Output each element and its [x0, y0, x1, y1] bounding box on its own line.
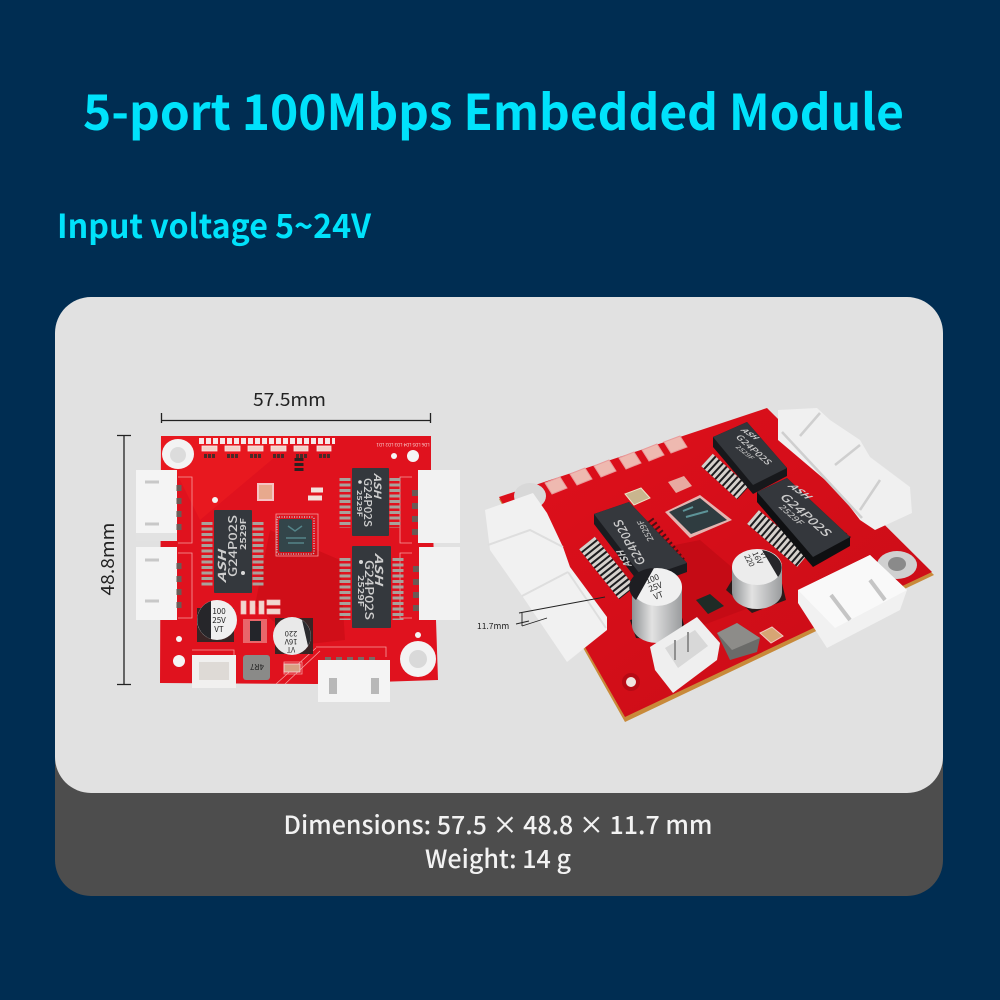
connector J2 bottom: [318, 660, 390, 702]
transformer chip TR1: [345, 546, 398, 628]
ethernet controller: [665, 495, 732, 538]
capacitor 220uF: 16V: [284, 636, 297, 647]
transformer chip TR upper right: [345, 468, 395, 536]
LED row: [545, 436, 687, 494]
weight text: Weight: 14 g: [425, 840, 572, 876]
capacitor 100uF: 100: [644, 571, 661, 587]
crystal: [625, 488, 650, 505]
transformer chip TR2: [207, 510, 258, 593]
chip A front: ASH: [612, 548, 635, 570]
transformer chip TR upper right: 2529F: [354, 490, 364, 517]
connector right upper: [415, 470, 460, 543]
connector power: [650, 617, 720, 693]
chip C front: [753, 478, 850, 567]
mounting holes: [162, 439, 194, 469]
capacitor 220uF: 220: [285, 628, 297, 639]
capacitor 220uF: 220: [741, 553, 757, 568]
capacitor 100uF: VT: [652, 588, 665, 603]
width dimension: 57.5mm: 57.5mm: [253, 386, 326, 412]
subtitle: input voltage: Input voltage 5~24V: [57, 200, 372, 248]
chip B back: ASH: [737, 426, 762, 441]
capacitor 100uF: [629, 568, 684, 643]
height callout: 11.7mm: [477, 597, 605, 632]
chip C front: ASH: [783, 481, 816, 501]
chip A front: 2529F: [634, 518, 657, 543]
power connector J1: [192, 655, 236, 688]
regulator IC: [696, 594, 724, 614]
chip B back: 2529F: [733, 444, 758, 461]
capacitor 220uF: VT: [758, 550, 771, 561]
connector left lower: [136, 547, 179, 620]
transformer chip TR1: G24P02S: [361, 560, 378, 620]
transformer chip TR2: G24P02S: [224, 515, 241, 577]
ethernet controller QFN: [279, 519, 312, 552]
width dimension: 57.5mm: [162, 386, 430, 423]
right mounting hole: [877, 551, 917, 579]
LED resistors: [204, 454, 330, 458]
title: 5-port 100Mbps Embedded Module: [83, 74, 904, 145]
transformer chip TR2: ASH: [214, 548, 230, 584]
connector lower right: [798, 555, 907, 648]
capacitor 220uF: [726, 549, 786, 613]
left mounting hole: [514, 483, 546, 509]
pcb: [499, 408, 932, 717]
panel: product photo area: [55, 297, 943, 793]
small component cluster: [668, 476, 692, 493]
bottom mounting hole: [624, 675, 638, 689]
top-view circuit board: [136, 436, 460, 702]
test pad row: [199, 438, 335, 444]
capacitor 220uF: 16V: [749, 550, 766, 566]
status LEDs: [202, 446, 331, 451]
pin-1 dot TR1: [359, 560, 363, 564]
connector left upper: [136, 470, 179, 541]
connector right lower: [416, 547, 460, 620]
inductor: [243, 655, 270, 680]
connector left: [485, 493, 607, 662]
transformer chip TR upper right: G24P02S: [360, 478, 376, 527]
chip C front: 2529F: [776, 503, 809, 527]
capacitor 100uF: 25V: [647, 579, 664, 595]
small resistors: [241, 600, 280, 614]
regulator IC: [243, 619, 267, 643]
resistors: [294, 458, 304, 472]
capacitor 100uF: [197, 600, 237, 642]
inductor: 4R7: [249, 661, 264, 672]
transformer chip TR1: 2529F: [355, 575, 366, 607]
ceramic capacitor: [760, 627, 783, 643]
chip A front: [587, 502, 687, 593]
height callout: 11.7mm: 11.7mm: [477, 620, 509, 632]
perspective circuit board: [485, 408, 934, 722]
capacitor 220uF: [273, 617, 313, 655]
small ceramic capacitor: [284, 664, 300, 672]
transformer chip TR1: ASH: [371, 552, 387, 587]
transformer chip TR upper right: ASH: [371, 472, 386, 500]
inductor: [717, 623, 760, 660]
dimensions text: Dimensions: 57.5 × 48.8 × 11.7 mm: [284, 806, 712, 842]
capacitor 100uF: 25V: [212, 615, 226, 626]
silkscreen outlines: [178, 477, 412, 684]
transformer chip TR2: 2529F: [238, 518, 249, 550]
connector upper right: [778, 408, 912, 530]
panel: dimensions footer: [55, 700, 943, 896]
pcb: [160, 436, 438, 684]
capacitor 220uF: VT: [287, 644, 295, 654]
chip A front: G24P02S: [609, 518, 650, 567]
pin-1 dot TR: [358, 480, 362, 484]
chip B back: [707, 422, 787, 494]
capacitor 100uF: VT: [214, 624, 224, 635]
chip B back: G24P02S: [732, 432, 777, 467]
capacitor 100uF: 100: [212, 606, 226, 617]
chip C front: G24P02S: [776, 490, 838, 539]
pin-1 dot TR2: [241, 571, 245, 575]
height dimension: 48.8mm: 48.8mm: [94, 522, 120, 596]
pcb edge: [499, 410, 934, 722]
crystal: [258, 484, 273, 500]
pad labels row: LD6 LD5 LD4 LD3 LD2 LD1: [376, 441, 430, 447]
height dimension: 48.8mm: [94, 436, 131, 684]
